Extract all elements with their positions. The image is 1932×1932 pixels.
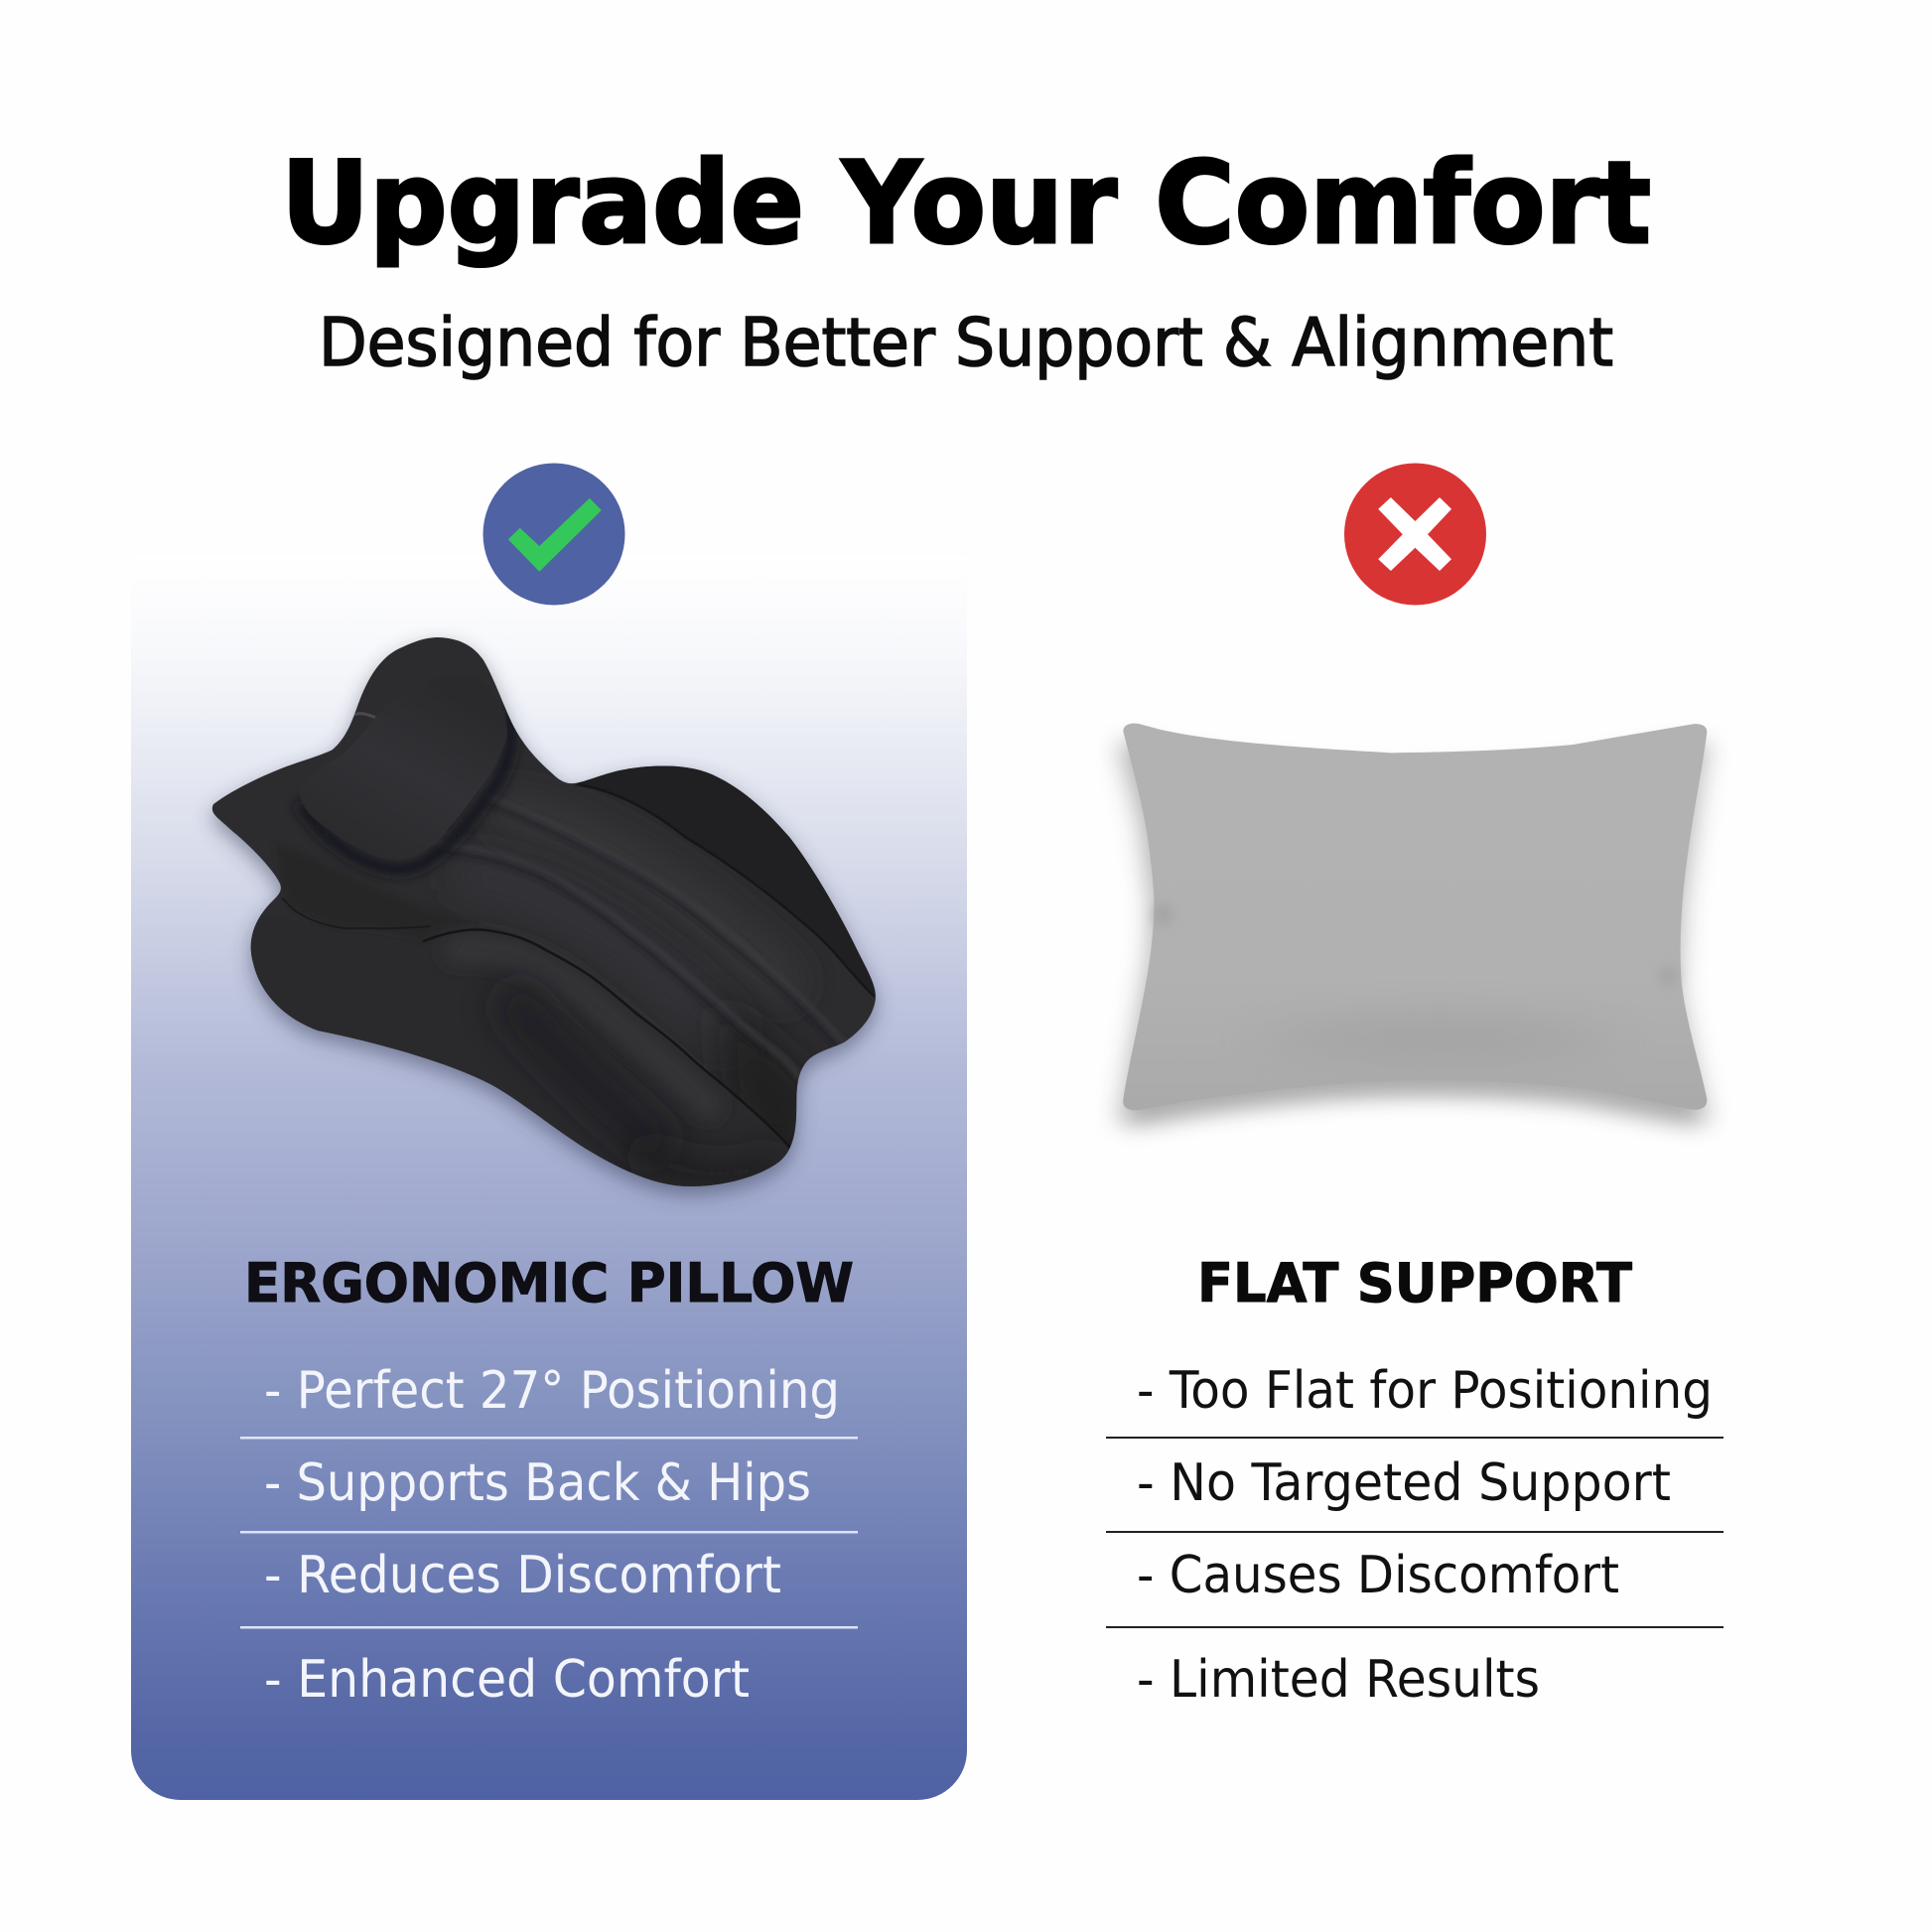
illustration: flat grey pillow [1121, 724, 1707, 1127]
icon: red cross circle [1344, 463, 1486, 606]
panel: ergonomic pillow [131, 463, 967, 1800]
ridges and edge lines [283, 784, 874, 1147]
drawback: too flat: - Too Flat for Positioning [1137, 1361, 1713, 1421]
panel: flat support [1106, 463, 1724, 1710]
cushion contact shadow [300, 710, 511, 870]
heading: flat support: FLAT SUPPORT [1197, 1252, 1632, 1314]
title: Upgrade Your Comfort [281, 137, 1651, 269]
strap slot [354, 714, 379, 719]
lower right shading [715, 1021, 806, 1158]
drawback: causes discomfort: - Causes Discomfort [1137, 1546, 1619, 1605]
drawback: no targeted support: - No Targeted Support [1137, 1453, 1671, 1513]
front lobe [238, 913, 789, 1191]
subtitle: Designed for Better Support & Alignment [319, 304, 1613, 381]
grey pillow shadow [1121, 740, 1706, 1127]
grey pillow body [1123, 724, 1707, 1110]
pillow head support [300, 676, 507, 859]
grey pillow bottom shade [1250, 1020, 1626, 1056]
back wing [574, 766, 876, 995]
infographic canvas [131, 155, 1724, 1800]
neck wedge [280, 849, 464, 937]
pillow body [212, 637, 876, 1186]
icon: green check in blue circle [483, 463, 625, 606]
pillow shadow [212, 645, 876, 1194]
benefit: enhanced comfort: - Enhanced Comfort [264, 1650, 750, 1710]
benefit: reduces discomfort: - Reduces Discomfort [264, 1546, 781, 1605]
drawback: limited results: - Limited Results [1137, 1650, 1540, 1710]
benefit: back and hips: - Supports Back & Hips [264, 1453, 811, 1513]
heading: ergonomic pillow: ERGONOMIC PILLOW [244, 1252, 854, 1314]
illustration: ergonomic pillow [212, 637, 894, 1194]
benefit: perfect positioning: - Perfect 27° Positioning [264, 1361, 840, 1421]
rib sheen [548, 817, 757, 951]
panel background gradient [131, 556, 967, 1800]
crease: right [1662, 964, 1675, 988]
crease: left [1156, 903, 1171, 927]
